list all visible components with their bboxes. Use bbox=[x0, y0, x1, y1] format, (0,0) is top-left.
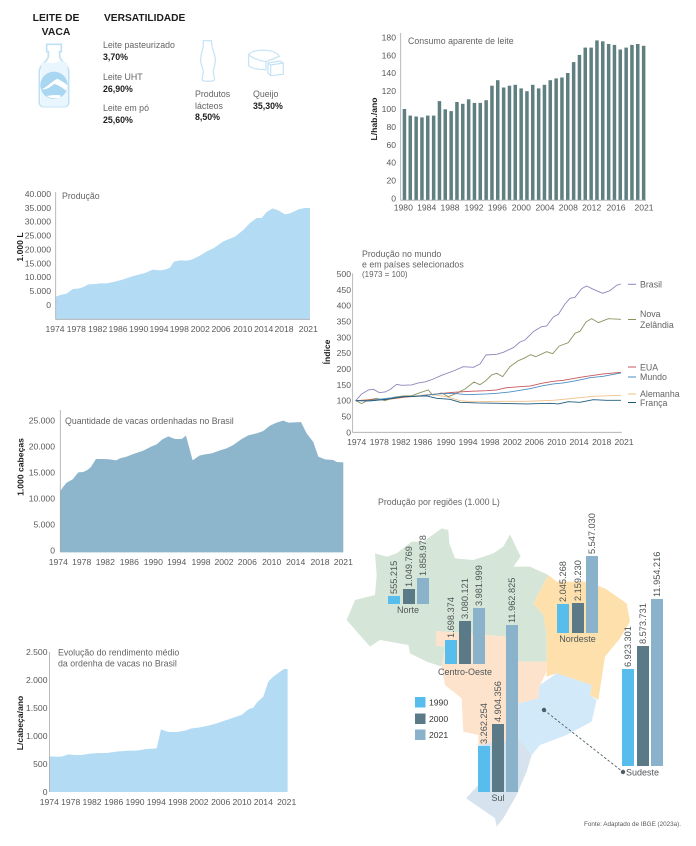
x axis labels: 2014 bbox=[286, 557, 305, 567]
y axis labels: 10.000 bbox=[25, 272, 51, 282]
x axis labels: 1992 bbox=[464, 202, 484, 212]
x axis labels: 1998 bbox=[170, 324, 189, 334]
x axis labels: 1984 bbox=[417, 202, 436, 212]
y axis labels: 250 bbox=[337, 348, 351, 358]
chart title bbox=[362, 249, 464, 279]
y axis labels: 25.000 bbox=[25, 231, 51, 241]
y axis labels: 5.000 bbox=[33, 520, 55, 530]
y axis labels: 150 bbox=[337, 380, 351, 390]
x axis labels: 2012 bbox=[582, 202, 601, 212]
y axis labels: 40 bbox=[386, 158, 396, 168]
legend: years: 2000 bbox=[429, 714, 448, 724]
y axis labels: 0 bbox=[346, 427, 351, 437]
heading: leite de vaca: VACA bbox=[42, 27, 71, 38]
y axis labels: 25.000 bbox=[29, 416, 55, 426]
x axis labels: 1974 bbox=[45, 324, 65, 334]
bars: Nordeste: 2.159.230 bbox=[573, 560, 583, 601]
y axis labels: 5.000 bbox=[29, 286, 51, 296]
x axis labels: 2002 bbox=[189, 797, 209, 807]
panel: leite de vaca header and bottle bbox=[33, 13, 79, 107]
icon: milk bottle bbox=[39, 44, 69, 107]
x axis labels bbox=[394, 202, 654, 212]
panel: producao por regioes bbox=[347, 497, 681, 828]
x axis labels: 1982 bbox=[88, 324, 107, 334]
chart title: da ordenha de vacas no Brasil bbox=[58, 658, 177, 668]
item: leite em po: Leite em pó bbox=[103, 103, 149, 113]
y axis labels: 20.000 bbox=[25, 244, 51, 254]
y axis labels: 30.000 bbox=[25, 217, 51, 227]
x axis labels: 1986 bbox=[120, 557, 139, 567]
x axis labels: 1974 bbox=[49, 557, 68, 567]
heading: versatilidade: VERSATILIDADE bbox=[104, 13, 186, 24]
y axis labels: 0 bbox=[43, 787, 48, 797]
y axis title: L/hab./ano bbox=[369, 98, 379, 140]
x axis labels: 2008 bbox=[559, 202, 578, 212]
x axis labels: 1974 bbox=[347, 437, 366, 447]
region: Sudeste bbox=[518, 673, 597, 755]
y axis labels: 140 bbox=[382, 68, 396, 78]
heading: Produção por regiões (1.000 L) bbox=[378, 497, 500, 507]
bars: Sul: 11.962.825 bbox=[507, 578, 517, 623]
icon: cheese bbox=[249, 50, 283, 76]
chart title: (1973 = 100) bbox=[362, 270, 408, 279]
bars: Centro-Oeste bbox=[438, 565, 492, 677]
area chart bbox=[49, 669, 288, 792]
bar chart bbox=[401, 33, 646, 200]
x axis labels: 1998 bbox=[168, 797, 187, 807]
heading: leite de vaca bbox=[33, 13, 79, 38]
bars: Norte: Norte bbox=[397, 605, 419, 615]
x axis labels: 2010 bbox=[233, 324, 252, 334]
bars: Nordeste: 2.045.268 bbox=[558, 561, 568, 602]
chart title: Produção bbox=[62, 191, 100, 201]
y axis labels: 2.000 bbox=[26, 675, 48, 685]
x axis labels: 1980 bbox=[394, 202, 413, 212]
x axis labels: 1978 bbox=[61, 797, 80, 807]
bars: Sudeste: 6.923.301 bbox=[623, 626, 633, 667]
y axis labels: 500 bbox=[33, 759, 48, 769]
y axis title: 1.000 cabeças bbox=[16, 438, 26, 496]
x axis labels: 1994 bbox=[147, 797, 166, 807]
y axis labels: 10.000 bbox=[29, 494, 55, 504]
x axis labels: 1998 bbox=[191, 557, 211, 567]
y axis labels: 50 bbox=[341, 412, 351, 422]
y axis title: 1.000 L bbox=[15, 232, 25, 262]
y axis labels: 40.000 bbox=[25, 189, 51, 199]
x axis labels: 1994 bbox=[458, 437, 478, 447]
icon: small bottle bbox=[201, 41, 215, 81]
x axis labels: 2006 bbox=[211, 797, 230, 807]
panel: quantidade de vacas bbox=[16, 410, 353, 567]
x axis labels: 2016 bbox=[606, 202, 626, 212]
y axis labels: 160 bbox=[382, 50, 396, 60]
x axis labels: 1974 bbox=[40, 797, 59, 807]
panel: producao bbox=[15, 189, 318, 334]
y axis labels: 60 bbox=[386, 140, 396, 150]
y axis labels: 2.500 bbox=[26, 647, 48, 657]
y axis labels: 80 bbox=[386, 122, 396, 132]
x axis labels: 1990 bbox=[144, 557, 163, 567]
legend: line series: Mundo bbox=[640, 372, 667, 382]
panel: versatilidade bbox=[103, 13, 283, 125]
bars: Sudeste: 8.573.731 bbox=[638, 603, 648, 644]
y axis labels: 180 bbox=[382, 32, 396, 42]
x axis labels: 2021 bbox=[334, 557, 353, 567]
item: leite em po: 25,60% bbox=[103, 115, 133, 125]
item: produtos lacteos: lácteos bbox=[195, 101, 223, 111]
bars: Nordeste: 5.547.030 bbox=[587, 513, 597, 554]
axis bbox=[59, 410, 61, 552]
x axis labels: 2010 bbox=[547, 437, 566, 447]
x axis labels: 2014 bbox=[254, 324, 273, 334]
x axis labels: 1978 bbox=[72, 557, 91, 567]
bars: Norte: 1.858.978 bbox=[418, 535, 428, 576]
bars: Sudeste: Sudeste bbox=[626, 768, 659, 778]
x axis labels: 1994 bbox=[149, 324, 169, 334]
source note: Fonte: Adaptado de IBGE (2023a). bbox=[584, 821, 681, 828]
region: Norte bbox=[347, 528, 548, 667]
item: produtos lacteos bbox=[195, 89, 231, 122]
item: queijo: Queijo bbox=[253, 89, 279, 99]
bars: Norte bbox=[388, 535, 429, 615]
x axis labels: 1982 bbox=[82, 797, 102, 807]
y axis labels: 500 bbox=[337, 269, 351, 279]
x axis labels: 1982 bbox=[96, 557, 115, 567]
legend: line series bbox=[628, 280, 680, 408]
y axis labels: 350 bbox=[337, 316, 351, 326]
y axis labels: 450 bbox=[337, 285, 351, 295]
y axis labels bbox=[29, 416, 55, 556]
x axis labels bbox=[49, 557, 353, 567]
chart title: Quantidade de vacas ordenhadas no Brasil bbox=[65, 416, 234, 426]
y axis labels: 300 bbox=[337, 332, 351, 342]
bars: Sul bbox=[478, 578, 518, 803]
bars: Centro-Oeste: 3.080.121 bbox=[460, 578, 470, 619]
x axis labels: 1990 bbox=[436, 437, 456, 447]
item: leite pasteurizado: Leite pasteurizado bbox=[103, 40, 175, 50]
area chart bbox=[56, 208, 310, 319]
panel: consumo aparente de leite bbox=[369, 32, 654, 213]
y axis title: Índice bbox=[322, 339, 332, 364]
x axis labels: 1990 bbox=[129, 324, 148, 334]
x axis labels: 2021 bbox=[299, 324, 318, 334]
item: queijo: 35,30% bbox=[253, 101, 283, 111]
item: produtos lacteos: Produtos bbox=[195, 89, 231, 99]
y axis labels: 1.500 bbox=[26, 703, 48, 713]
item: leite UHT bbox=[103, 72, 143, 94]
y axis labels bbox=[26, 647, 48, 797]
chart title: Consumo aparente de leite bbox=[408, 36, 514, 46]
bars: Norte: 555.215 bbox=[389, 561, 399, 594]
bars: Norte: 1.049.769 bbox=[404, 546, 414, 587]
item: leite pasteurizado bbox=[103, 40, 175, 62]
bars: Sul: 3.262.254 bbox=[479, 703, 489, 744]
legend: years bbox=[415, 697, 448, 740]
chart title bbox=[58, 648, 179, 668]
region: Sul bbox=[466, 738, 532, 827]
y axis labels bbox=[25, 189, 51, 310]
y axis labels: 0 bbox=[46, 300, 51, 310]
x axis labels: 1988 bbox=[440, 202, 460, 212]
x axis labels: 2010 bbox=[232, 797, 252, 807]
panel: rendimento medio bbox=[15, 647, 296, 807]
y axis labels: 15.000 bbox=[25, 258, 51, 268]
panel: producao no mundo bbox=[322, 249, 680, 447]
legend: line series: França bbox=[640, 398, 667, 408]
chart title: e em países selecionados bbox=[362, 260, 464, 270]
bars: Centro-Oeste: Centro-Oeste bbox=[438, 667, 492, 677]
legend: line series: EUA bbox=[640, 362, 658, 372]
legend: line series: Brasil bbox=[640, 280, 662, 290]
x axis labels: 1978 bbox=[67, 324, 86, 334]
bars: Nordeste bbox=[557, 513, 598, 644]
y axis labels: 400 bbox=[337, 301, 351, 311]
y axis labels: 100 bbox=[382, 104, 396, 114]
y axis labels bbox=[382, 32, 396, 204]
axis bbox=[48, 652, 50, 792]
chart title: Produção no mundo bbox=[362, 249, 441, 259]
x axis labels: 2004 bbox=[535, 202, 555, 212]
x axis labels bbox=[45, 324, 318, 334]
y axis labels: 1.000 bbox=[26, 731, 48, 741]
legend: line series: Alemanha bbox=[640, 389, 680, 399]
legend: years: 1990 bbox=[429, 698, 448, 708]
legend: line series: Zelândia bbox=[640, 320, 674, 330]
x axis labels: 1994 bbox=[167, 557, 186, 567]
legend: line series: Nova bbox=[640, 309, 661, 319]
x axis labels: 1978 bbox=[370, 437, 389, 447]
x axis labels: 1998 bbox=[480, 437, 500, 447]
y axis labels: 35.000 bbox=[25, 203, 51, 213]
y axis labels: 200 bbox=[337, 364, 351, 374]
x axis labels: 1990 bbox=[125, 797, 145, 807]
x axis labels: 1996 bbox=[488, 202, 507, 212]
x axis labels: 1986 bbox=[108, 324, 128, 334]
axis bbox=[56, 192, 310, 319]
y axis labels: 100 bbox=[337, 396, 351, 406]
bars: Centro-Oeste: 1.698.374 bbox=[446, 597, 456, 638]
item: leite UHT: 26,90% bbox=[103, 84, 133, 94]
y axis labels: 20 bbox=[386, 176, 396, 186]
legend: years: 2021 bbox=[429, 730, 448, 740]
item: leite UHT: Leite UHT bbox=[103, 72, 143, 82]
x axis labels: 2002 bbox=[191, 324, 210, 334]
x axis labels: 1986 bbox=[104, 797, 123, 807]
y axis labels: 120 bbox=[382, 86, 396, 96]
y axis labels: 15.000 bbox=[29, 468, 55, 478]
bars: Sul: Sul bbox=[491, 793, 505, 803]
x axis labels: 1982 bbox=[391, 437, 411, 447]
item: queijo bbox=[253, 89, 283, 111]
x axis labels: 2014 bbox=[254, 797, 273, 807]
x axis labels: 2006 bbox=[525, 437, 544, 447]
y axis labels: 20.000 bbox=[29, 442, 55, 452]
x axis labels: 2021 bbox=[614, 437, 634, 447]
connector: Sudeste bbox=[542, 708, 625, 774]
y axis labels: 0 bbox=[391, 194, 396, 204]
bars: Sudeste: 11.954.216 bbox=[652, 552, 662, 597]
bars: Centro-Oeste: 3.981.999 bbox=[474, 565, 484, 606]
x axis labels bbox=[347, 437, 634, 447]
region: Centro-Oeste bbox=[436, 631, 547, 745]
x axis labels: 2002 bbox=[214, 557, 234, 567]
bars: Sudeste bbox=[622, 552, 663, 778]
line chart bbox=[353, 273, 622, 432]
x axis labels: 2002 bbox=[503, 437, 522, 447]
x axis labels: 2000 bbox=[512, 202, 531, 212]
bars: Sul: 4.904.356 bbox=[493, 681, 503, 722]
map of Brazil bbox=[347, 528, 630, 827]
bars: Nordeste: Nordeste bbox=[559, 634, 596, 644]
x axis labels: 2006 bbox=[238, 557, 257, 567]
item: leite em po bbox=[103, 103, 149, 125]
x axis labels: 2021 bbox=[634, 202, 654, 212]
x axis labels: 2010 bbox=[262, 557, 281, 567]
x axis labels: 2006 bbox=[211, 324, 231, 334]
region: Nordeste bbox=[533, 575, 630, 700]
x axis labels bbox=[40, 797, 296, 807]
chart title: Evolução do rendimento médio bbox=[58, 648, 179, 658]
area chart bbox=[60, 421, 343, 552]
x axis labels: 2021 bbox=[277, 797, 296, 807]
y axis title: L/cabeça/ano bbox=[15, 696, 25, 750]
x axis labels: 2014 bbox=[569, 437, 589, 447]
x axis labels: 1986 bbox=[413, 437, 432, 447]
y axis labels: 0 bbox=[50, 546, 55, 556]
x axis labels: 2018 bbox=[310, 557, 330, 567]
item: leite pasteurizado: 3,70% bbox=[103, 52, 128, 62]
heading: leite de vaca: LEITE DE bbox=[33, 13, 79, 24]
x axis labels: 2018 bbox=[592, 437, 611, 447]
y axis labels bbox=[337, 269, 351, 437]
x axis labels: 2018 bbox=[274, 324, 294, 334]
item: produtos lacteos: 8,50% bbox=[195, 112, 220, 122]
